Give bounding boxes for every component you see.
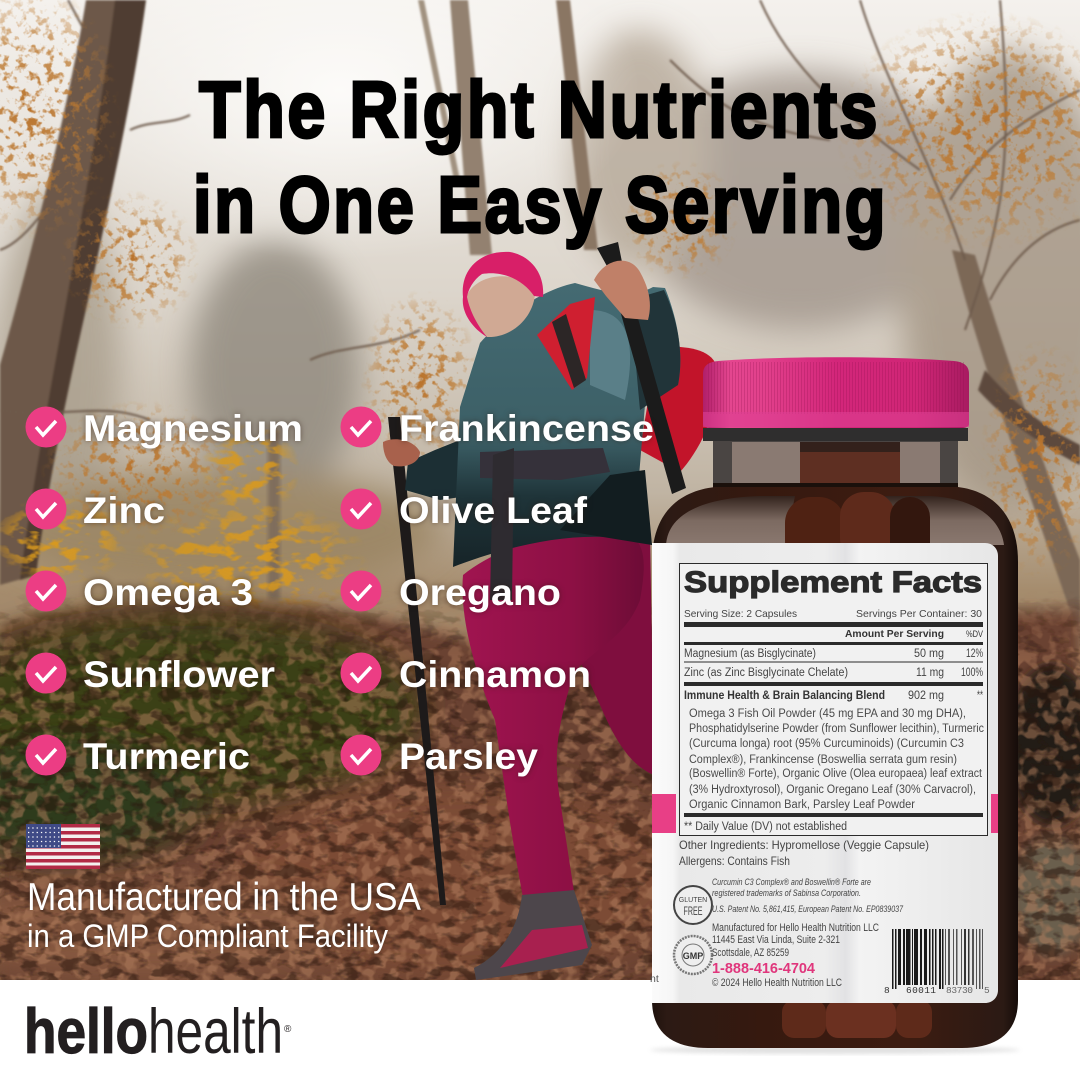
nutrient rows: Magnesium (as Bisglycinate) bbox=[684, 648, 816, 660]
icon: gluten free: FREE bbox=[684, 904, 702, 918]
item: Cinnamon bbox=[340, 652, 591, 695]
blend ingredients: Omega 3 Fish Oil Powder (45 mg EPA and 30 mg DHA), bbox=[689, 708, 966, 720]
logo: hellohealth: hello bbox=[24, 997, 148, 1067]
item: Parsley bbox=[340, 734, 538, 777]
other ingredients and allergens: Other Ingredients: Hypromellose (Veggie Capsule) bbox=[679, 838, 929, 852]
icon: US flag bbox=[26, 824, 100, 869]
column headers bbox=[845, 629, 983, 640]
forest floor bbox=[0, 590, 1080, 985]
right trekking pole bbox=[597, 242, 686, 494]
title: in One Easy Serving bbox=[193, 160, 888, 249]
trademark notes: U.S. Patent No. 5,861,415, European Patent No. EP0839037 bbox=[712, 904, 904, 915]
item: Olive Leaf bbox=[340, 488, 588, 531]
product bottle bbox=[650, 357, 1020, 1054]
footnote: ** Daily Value (DV) not established bbox=[684, 821, 847, 833]
item: Omega 3: Omega 3 bbox=[83, 572, 253, 613]
hat bbox=[463, 252, 543, 337]
item: Olive Leaf: Olive Leaf bbox=[399, 490, 588, 531]
manufacturer address: Manufactured for Hello Health Nutrition LLC bbox=[712, 922, 879, 934]
other ingredients and allergens: Allergens: Contains Fish bbox=[679, 854, 790, 868]
waist belt bbox=[480, 448, 610, 480]
nutrient rows: Immune Health & Brain Balancing Blend bbox=[684, 690, 885, 702]
supplement facts panel bbox=[680, 564, 988, 836]
icon: GMP seal: GMP bbox=[683, 951, 703, 961]
boot bbox=[474, 890, 592, 980]
capsules seen through glass bbox=[782, 492, 932, 1038]
blend ingredients: (Boswellin® Forte), Organic Olive (Olea europaea) leaf extract bbox=[689, 768, 983, 780]
nutrient rows: 11 mg bbox=[916, 667, 944, 679]
hands bbox=[383, 439, 420, 466]
nutrient rows: 100% bbox=[961, 667, 983, 679]
backpack bbox=[640, 347, 718, 472]
barcode bbox=[884, 929, 990, 996]
item: Oregano bbox=[340, 570, 561, 613]
logo: hellohealth: health bbox=[148, 997, 283, 1067]
blend ingredients: Phosphatidylserine Powder (from Sunflower lecithin), Turmeric bbox=[689, 723, 984, 735]
item: Magnesium: Magnesium bbox=[83, 408, 303, 449]
shadow under bottle bbox=[650, 1046, 1020, 1054]
manufacturing statement bbox=[27, 876, 421, 954]
hiker bbox=[383, 242, 718, 980]
manufacturing statement: Manufactured in the USA bbox=[27, 876, 421, 919]
left sleeve bbox=[405, 440, 475, 500]
panel heading: Supplement Facts bbox=[684, 566, 982, 599]
barcode: 8 bbox=[884, 985, 890, 996]
tree trunks and branches bbox=[0, 0, 1080, 640]
title: The Right Nutrients bbox=[199, 65, 880, 154]
nutrient rows bbox=[684, 648, 983, 702]
left trekking pole bbox=[388, 417, 446, 905]
icon: gluten free bbox=[674, 886, 712, 924]
foliage: orange and yellow leaves bbox=[0, 0, 1080, 620]
blend ingredients bbox=[689, 708, 984, 811]
copyright: © 2024 Hello Health Nutrition LLC bbox=[712, 977, 842, 989]
logo: hellohealth bbox=[24, 997, 292, 1067]
jacket bbox=[453, 283, 680, 567]
item: Zinc: Zinc bbox=[83, 490, 165, 531]
item: Parsley: Parsley bbox=[399, 736, 538, 777]
white footer band bbox=[0, 980, 1080, 1080]
item: Turmeric bbox=[26, 734, 250, 777]
cropped label text: nt bbox=[650, 973, 659, 985]
bottle neck bbox=[713, 438, 958, 489]
manufacturer address: Scottsdale, AZ 85259 bbox=[712, 947, 789, 959]
item: Omega 3 bbox=[26, 570, 253, 613]
lower jacket shadow bbox=[560, 470, 652, 545]
nutrient rows: 12% bbox=[966, 648, 983, 660]
item: Sunflower bbox=[26, 652, 275, 695]
rear leg bbox=[570, 530, 654, 775]
nutrient rows: 50 mg bbox=[914, 648, 944, 660]
item: Sunflower: Sunflower bbox=[83, 654, 275, 695]
column headers: %DV bbox=[966, 629, 983, 639]
nutrient rows: Zinc (as Zinc Bisglycinate Chelate) bbox=[684, 667, 848, 679]
rules bbox=[684, 622, 983, 817]
manufacturing statement: in a GMP Compliant Facility bbox=[27, 918, 388, 954]
blend ingredients: (3% Hydroxtyrosol), Organic Oregano Leaf (30% Carvacrol), bbox=[689, 784, 976, 796]
icon: gluten free: GLUTEN bbox=[679, 897, 707, 904]
label bbox=[652, 543, 998, 1003]
pink label bands bbox=[652, 794, 998, 833]
serving info bbox=[684, 608, 982, 620]
item: Cinnamon: Cinnamon bbox=[399, 654, 591, 695]
cap bbox=[703, 357, 969, 428]
face bbox=[467, 276, 535, 337]
blend ingredients: Organic Cinnamon Bark, Parsley Leaf Powder bbox=[689, 799, 915, 811]
column headers: Amount Per Serving bbox=[845, 629, 944, 640]
item: Zinc bbox=[26, 488, 165, 531]
title bbox=[193, 65, 888, 249]
logo: hellohealth: ® bbox=[284, 1024, 292, 1035]
neck ring bbox=[703, 428, 968, 441]
trademark notes: Curcumin C3 Complex® and Boswellin® Forte are bbox=[712, 877, 871, 888]
nutrient rows: ** bbox=[977, 690, 983, 702]
item: Turmeric: Turmeric bbox=[83, 736, 250, 777]
distant tree silhouettes bbox=[0, 30, 1080, 600]
blend ingredients: (Curcuma longa) root (95% Curcuminoids) (Curcumin C3 bbox=[689, 738, 964, 750]
phone number: 1-888-416-4704 bbox=[712, 960, 816, 977]
trademark notes: registered trademarks of Sabinsa Corporation. bbox=[712, 888, 861, 899]
item: Frankincense: Frankincense bbox=[399, 408, 654, 449]
trademark notes bbox=[712, 877, 904, 915]
bottle body bbox=[652, 487, 1018, 1048]
serving info: Servings Per Container: 30 bbox=[856, 608, 982, 620]
nutrient rows: 902 mg bbox=[908, 690, 944, 702]
front leg bbox=[462, 527, 644, 908]
manufacturer address bbox=[712, 922, 879, 959]
other ingredients and allergens bbox=[679, 838, 929, 868]
shoulder strap bbox=[537, 297, 595, 390]
ingredient checklist bbox=[26, 406, 654, 777]
shoulder highlights bbox=[666, 496, 1004, 545]
manufacturer address: 11445 East Via Linda, Suite 2-321 bbox=[712, 934, 840, 946]
fog highlight bbox=[40, 0, 640, 260]
barcode: 60011 bbox=[906, 985, 936, 996]
serving info: Serving Size: 2 Capsules bbox=[684, 608, 797, 620]
blend ingredients: Complex®), Frankincense (Boswellia serrata gum resin) bbox=[689, 754, 957, 766]
item: Oregano: Oregano bbox=[399, 572, 561, 613]
barcode: 5 bbox=[984, 985, 990, 996]
barcode: 83730 bbox=[946, 985, 973, 996]
icon: GMP seal bbox=[674, 936, 712, 974]
